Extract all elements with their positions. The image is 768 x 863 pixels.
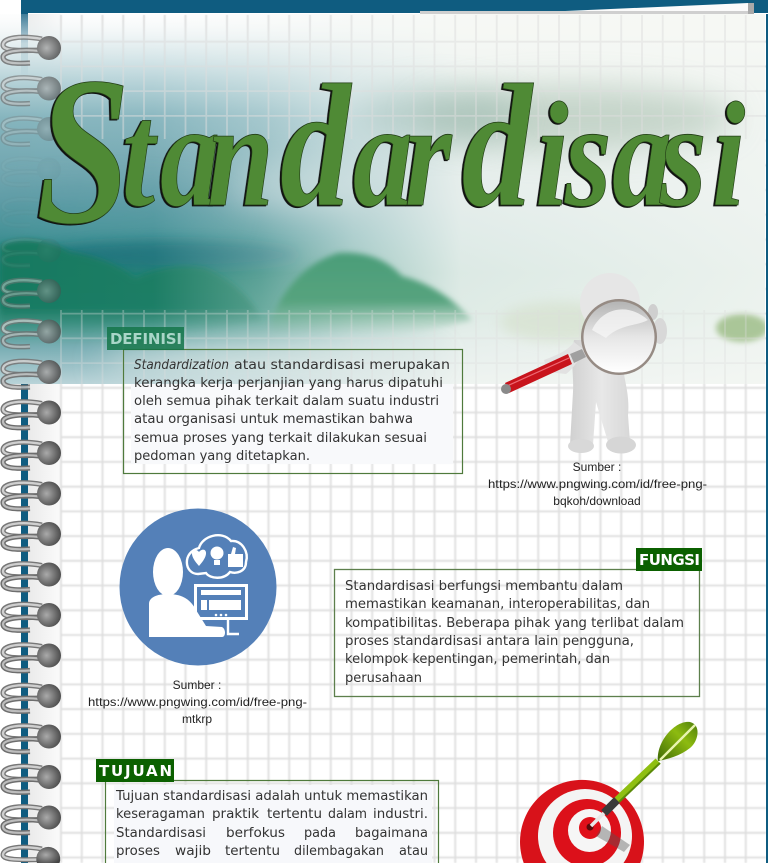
text: tujuan: dalam bbox=[328, 807, 367, 822]
text: tujuan: praktik bbox=[212, 807, 259, 822]
label: definisi: DEFINISI bbox=[110, 330, 182, 348]
text: definisi: atau organisasi untuk memastikan bahwa bbox=[134, 412, 413, 427]
caption: icon source bbox=[88, 678, 307, 726]
text: definisi bbox=[134, 358, 450, 464]
title: t bbox=[122, 72, 159, 238]
text: fungsi bbox=[345, 579, 684, 686]
text: definisi: oleh semua pihak terkait dalam suatu industri bbox=[134, 394, 439, 409]
text: tujuan: pada bbox=[304, 826, 336, 841]
title: i bbox=[535, 72, 569, 238]
text: definisi: kerangka kerja perjanjian yang harus dipatuhi bbox=[134, 376, 443, 391]
caption: figure source: bqkoh/download bbox=[553, 494, 641, 508]
panel: fungsi bbox=[334, 548, 702, 696]
text: tujuan: Standardisasi bbox=[116, 826, 206, 841]
caption: figure source bbox=[488, 460, 707, 508]
title: a bbox=[353, 72, 413, 238]
text: fungsi: proses standardisasi antara lain pengguna, bbox=[345, 634, 634, 649]
text: tujuan: industri. bbox=[373, 807, 428, 822]
caption: icon source: mtkrp bbox=[182, 712, 212, 726]
title: i bbox=[712, 72, 746, 238]
text: tujuan: bagaimana bbox=[355, 826, 428, 841]
text: tujuan: berfokus bbox=[226, 826, 285, 841]
text: tujuan: tertentu bbox=[225, 844, 280, 859]
title: s bbox=[564, 72, 611, 238]
text: fungsi: perusahaan bbox=[345, 671, 422, 686]
title: d bbox=[462, 49, 534, 244]
text: tujuan: wajib bbox=[175, 844, 211, 859]
icon: user with computer in blue circle bbox=[120, 508, 276, 666]
title: r bbox=[405, 72, 453, 238]
text: definisi: pedoman yang ditetapkan. bbox=[134, 449, 310, 464]
title: d bbox=[280, 49, 352, 244]
text: definisi: semua proses yang terkait dilakukan sesuai bbox=[134, 431, 427, 446]
text: fungsi: memastikan keamanan, interoperabilitas, dan bbox=[345, 597, 650, 612]
text: tujuan: Tujuan standardisasi adalah untuk memastikan bbox=[115, 789, 428, 804]
text: tujuan: keseragaman bbox=[116, 807, 205, 822]
caption: figure source: https://www.pngwing.com/id/free-png- bbox=[488, 477, 707, 491]
caption: icon source: https://www.pngwing.com/id/free-png- bbox=[88, 695, 307, 709]
title: a bbox=[612, 72, 672, 238]
title bbox=[36, 33, 746, 268]
icon: figure with magnifying glass bbox=[501, 273, 667, 454]
label: tujuan: TUJUAN bbox=[99, 762, 172, 780]
text: definisi: atau standardisasi merupakan bbox=[234, 358, 450, 373]
caption: icon source: Sumber : bbox=[173, 678, 221, 692]
spiral binding rings bbox=[3, 36, 61, 863]
panel: tujuan bbox=[96, 759, 438, 863]
label: fungsi: FUNGSI bbox=[639, 551, 700, 569]
text: tujuan: tertentu bbox=[267, 807, 322, 822]
text: fungsi: kelompok kepentingan, pemerintah, dan bbox=[345, 652, 610, 667]
text: tujuan: proses bbox=[116, 844, 160, 859]
text: tujuan: atau bbox=[399, 844, 428, 859]
panel: definisi bbox=[107, 327, 462, 474]
banner photo: misty forest bbox=[0, 14, 768, 384]
text: definisi: Standardization bbox=[134, 358, 229, 373]
text: fungsi: Standardisasi berfungsi membantu dalam bbox=[345, 579, 623, 594]
title: s bbox=[659, 72, 707, 238]
text: tujuan bbox=[115, 789, 428, 859]
caption: figure source: Sumber : bbox=[573, 460, 621, 474]
title: n bbox=[207, 72, 274, 238]
title: a bbox=[160, 72, 220, 238]
text: fungsi: kompatibilitas. Beberapa pihak yang terlibat dalam bbox=[345, 616, 684, 631]
title: S bbox=[36, 33, 130, 268]
text: tujuan: dilembagakan bbox=[294, 844, 384, 859]
icon: dart and target bbox=[520, 722, 698, 863]
